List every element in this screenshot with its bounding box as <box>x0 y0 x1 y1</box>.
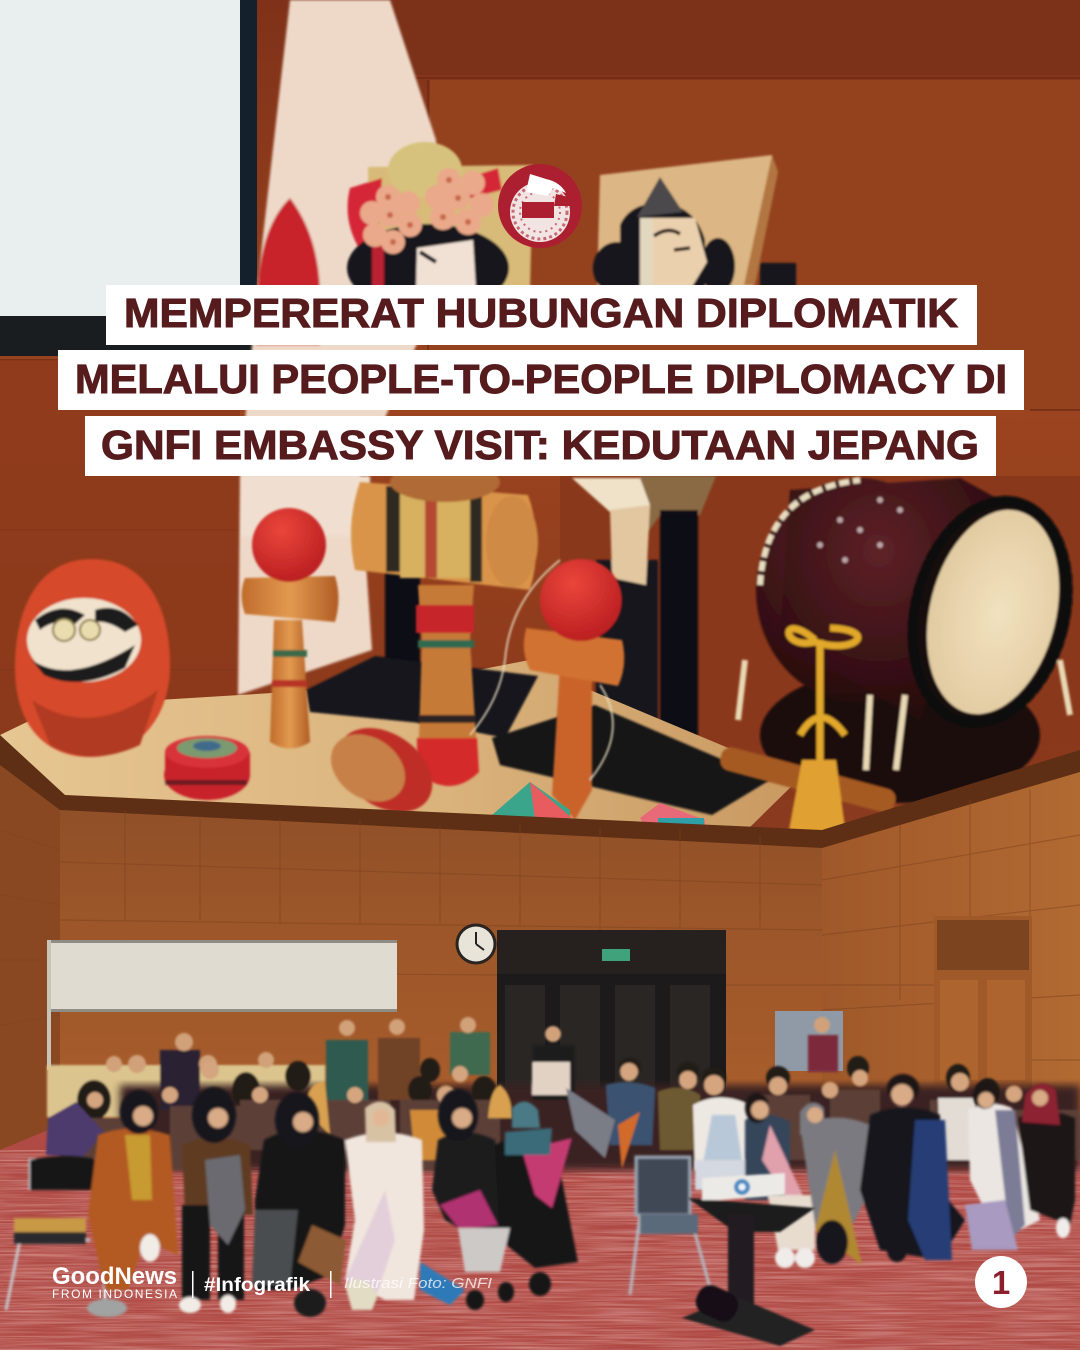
icon: big kendama centre <box>351 462 538 786</box>
photo: samurai doll lower body behind title <box>385 476 716 740</box>
photo: back rows of audience <box>46 1017 1080 1180</box>
icon: fallen cup <box>318 711 448 829</box>
brand: GoodNews from Indonesia: FROM INDONESIA <box>52 1287 177 1301</box>
photo: front row audience left <box>6 1087 578 1317</box>
photo: dark double doors <box>497 930 726 1100</box>
title band line 3: GNFI EMBASSY VISIT: KEDUTAAN JEPANG <box>101 422 979 468</box>
photo: right wooden door and vent <box>775 916 1032 1086</box>
photo: projection screen <box>0 0 257 356</box>
icon: projector on stand <box>682 1173 815 1346</box>
photo: doll left with floral headdress <box>347 142 533 312</box>
icon: taiko drum <box>718 478 1080 835</box>
photo: Japanese flag <box>238 0 440 695</box>
photo: doll right samurai <box>593 155 796 294</box>
icon: yo-yo <box>164 736 250 800</box>
photo: lower room wall <box>0 735 1080 1180</box>
title band line 2: MELALUI PEOPLE-TO-PEOPLE DIPLOMACY DI <box>75 356 1007 402</box>
photo credit: Ilustrasi Foto: GNFI <box>344 1275 492 1292</box>
icon: red kendama right <box>470 559 624 820</box>
photo: front row audience right <box>630 1074 1075 1295</box>
title band line 1: MEMPERERAT HUBUNGAN DIPLOMATIK <box>124 290 958 336</box>
photo: upper wall background <box>0 0 1080 800</box>
photo: rolled projector screen <box>47 940 397 1070</box>
page number badge: 1 <box>992 1264 1010 1301</box>
photo: black doll bases <box>306 656 770 815</box>
icon: small kendama left <box>242 508 338 748</box>
icon: wall clock <box>456 924 496 964</box>
footer divider left <box>192 1271 194 1298</box>
photo: carpet floor <box>0 1125 1080 1350</box>
hashtag: Infografik: #Infografik <box>204 1275 310 1296</box>
logo: GNFI emblem <box>498 164 582 248</box>
footer divider right <box>330 1271 332 1298</box>
icon: origami pieces <box>492 782 705 830</box>
page number badge <box>975 1256 1027 1308</box>
icon: daruma doll <box>15 559 170 757</box>
brand: GoodNews from Indonesia: GoodNews <box>52 1263 177 1290</box>
photo: table <box>0 658 800 832</box>
